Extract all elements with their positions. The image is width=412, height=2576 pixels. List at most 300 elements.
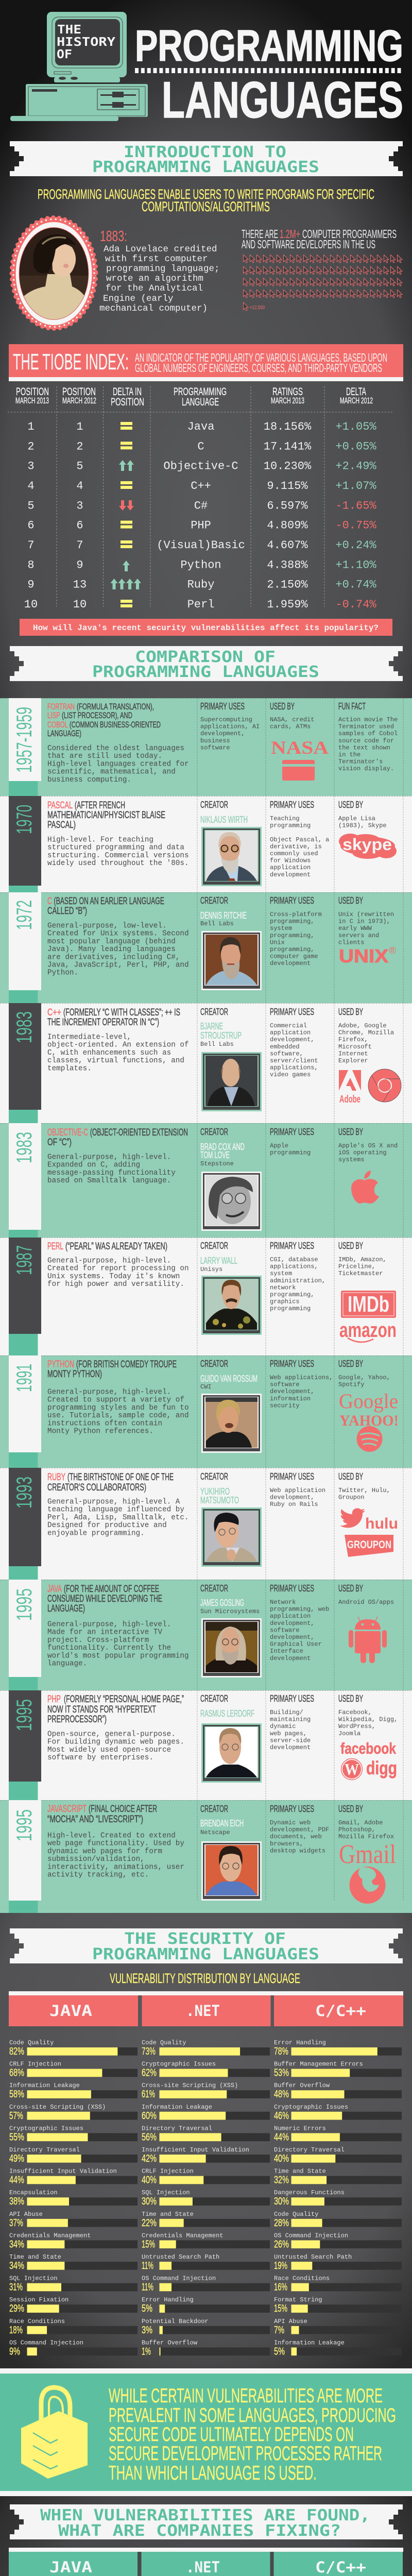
used by: USED BY	[338, 1583, 363, 1594]
description: Java). Many leading languages	[47, 945, 176, 954]
year plate 1991: 1991	[12, 1364, 36, 1392]
bar: Race Conditions 16%	[274, 2275, 402, 2293]
bar: Untrusted Search Path 19%: 19%	[274, 2260, 287, 2272]
heading banner: security: PROGRAMMING LANGUAGES	[92, 1945, 319, 1963]
used by: in C in 1973),	[338, 918, 390, 925]
dark background: security	[0, 1913, 412, 2368]
primary uses: development,	[270, 1634, 314, 1641]
language title	[47, 1127, 188, 1148]
bar: API Abuse 37%: 37%	[9, 2217, 23, 2229]
photo: Yukihiro Matsumoto	[201, 1507, 262, 1567]
bar: Cryptographic Issues 55%: Cryptographic Issues	[9, 2125, 83, 2132]
heading banner: what companies fix: WHAT ARE COMPANIES FIXING?	[58, 2522, 341, 2540]
heading banner: security	[10, 1928, 403, 1963]
heading banner: what companies fix	[10, 2504, 403, 2540]
used by: NASA, credit	[270, 716, 314, 723]
bar: Time and State 32%: Time and State	[274, 2168, 326, 2175]
primary uses: Web application	[270, 1487, 325, 1494]
bar: Time and State 22%	[142, 2211, 270, 2229]
photo: Brendan Eich	[201, 1841, 262, 1901]
logo: Adobe: Adobe	[339, 1094, 360, 1105]
table header: LANGUAGE	[182, 396, 219, 408]
used by: Ticketmaster	[338, 1270, 383, 1277]
description: structuring. Commercial versions	[47, 852, 189, 860]
table row: Java: +1.05%	[335, 420, 376, 433]
used by: USED BY	[270, 701, 295, 711]
bar: Time and State 22%: 22%	[142, 2217, 157, 2229]
year plate 1993: 1993	[12, 1477, 36, 1509]
description: functionality. Currently the	[47, 1644, 171, 1652]
primary uses: PRIMARY USES	[270, 799, 314, 810]
photo: Guido van Rossum	[201, 1394, 262, 1453]
logo: UNIX: ®	[389, 945, 396, 956]
description: dynamic web pages for form	[47, 1848, 162, 1856]
creator	[200, 1006, 242, 1048]
description: High-level. For teaching	[47, 836, 153, 844]
row: C	[9, 892, 396, 1003]
used by: Gmail, Adobe	[338, 1819, 383, 1826]
fun fact: Action movie The	[338, 716, 398, 723]
bar: Insufficient Input Validation 42%: 42%	[142, 2153, 157, 2164]
fun fact: Terminator used	[338, 723, 394, 731]
creator: CREATOR	[200, 1006, 228, 1017]
primary uses: video games	[270, 1071, 311, 1078]
bar: SQL Injection 30%: 30%	[142, 2196, 157, 2207]
language title: “MOCHA” AND “LIVESCRIPT”)	[47, 1814, 143, 1825]
language title: (BASED ON AN EARLIER LANGUAGE	[54, 896, 164, 907]
primary uses: PRIMARY USES	[270, 895, 314, 906]
year plate 1983	[9, 1003, 41, 1123]
bar: Cryptographic Issues 46%: Cryptographic Issues	[274, 2104, 348, 2111]
language tabs: vulnerability: C/C++	[315, 2002, 366, 2020]
creator: RASMUS LERDORF	[200, 1708, 254, 1719]
year plate 1995: 1995	[12, 1588, 36, 1621]
creator: Netscape	[200, 1829, 230, 1836]
table row: Perl: 10	[73, 598, 87, 611]
primary uses	[270, 1358, 333, 1409]
bar: Time and State 34%	[9, 2253, 138, 2272]
panel: TIOBE index	[8, 344, 403, 611]
primary uses: development,	[270, 1620, 314, 1627]
table row: C: +0.05%	[335, 440, 376, 453]
creator: BRAD COX AND	[200, 1142, 245, 1152]
description: enjoyable programming.	[47, 1529, 145, 1537]
description: Python.	[47, 969, 78, 977]
language title	[47, 1241, 167, 1252]
primary uses: development	[270, 1744, 311, 1751]
table header: POSITION	[16, 386, 49, 398]
bar chart: .NET vulnerabilities	[142, 2039, 270, 2357]
primary uses: computer game	[270, 953, 318, 960]
bar: Untrusted Search Path 11%: 11%	[142, 2260, 153, 2272]
bar: Potential Backdoor 3%	[142, 2318, 270, 2336]
bar: Encapsulation 38%: Encapsulation	[9, 2189, 58, 2196]
description: Monty Python references.	[47, 1427, 153, 1435]
primary uses	[270, 1803, 329, 1854]
primary uses: graphics	[270, 1298, 300, 1306]
logo: Spotify	[356, 1426, 382, 1452]
logo: IMDb: IMDb	[348, 1292, 389, 1317]
description: Created to support a variety of	[47, 1396, 184, 1404]
portrait: Ada Lovelace	[11, 217, 97, 329]
dark background: fixes and tips	[0, 2496, 412, 2576]
table row: Python: 9	[76, 558, 83, 571]
bar: OS Command Injection 11%: 11%	[142, 2282, 153, 2293]
bar: CRLF Injection 40%: 40%	[142, 2175, 157, 2186]
bar: API Abuse 37%	[9, 2211, 138, 2229]
primary uses: development, PDF	[270, 1826, 329, 1834]
row: Python	[9, 1355, 399, 1468]
bar: Cryptographic Issues 55%	[9, 2125, 138, 2143]
bar: Dangerous Functions 30%	[274, 2189, 402, 2207]
table row: Perl: Perl	[187, 598, 214, 611]
primary uses: development	[270, 960, 311, 967]
creator	[200, 1693, 254, 1719]
legend: one cursor equals 12,500	[243, 302, 265, 311]
bar: Information Leakage 5%	[274, 2339, 402, 2357]
language title: C++	[47, 1007, 61, 1018]
used by	[338, 799, 387, 829]
used by: Unix (rewritten	[338, 911, 394, 918]
language title: THE INCREMENT OPERATOR IN “C”)	[47, 1017, 159, 1028]
table row: C: 17.141%	[264, 440, 312, 453]
description: General-purpose, high-level.	[47, 1621, 171, 1629]
table header: DELTA	[346, 386, 366, 398]
icon grid: cursors	[243, 255, 403, 301]
used by: Twitter, Hulu,	[338, 1487, 390, 1494]
logo: NASA: NASA	[271, 737, 329, 758]
bar: Directory Traversal 49%: 49%	[9, 2153, 24, 2164]
primary uses: PRIMARY USES	[270, 1803, 314, 1814]
table row: Ruby: 9	[27, 579, 35, 591]
text block: 1883 Ada Lovelace: mechanical computer)	[99, 303, 208, 314]
primary uses: server/client	[270, 1057, 318, 1064]
bar: Insufficient Input Validation 42%	[142, 2146, 270, 2164]
language title: JAVA	[47, 1584, 62, 1595]
description: classes, virtual functions, and	[47, 1057, 184, 1065]
language tabs: fixes: JAVA	[49, 2558, 92, 2576]
description: Made for an interactive TV	[47, 1629, 162, 1637]
description: General-purpose, high-level.	[47, 1257, 171, 1265]
table row: C#	[27, 499, 376, 512]
language title: (FINAL CHOICE AFTER	[89, 1804, 157, 1815]
bar: Buffer Overflow 48%	[274, 2082, 402, 2100]
description: world's most popular programming	[47, 1652, 189, 1660]
table row: Python: Python	[180, 558, 221, 571]
fun fact: Terminator's	[338, 758, 383, 766]
used by: servers and	[338, 932, 379, 939]
used by: USED BY	[338, 799, 363, 810]
bar: Code Quality 82%	[9, 2039, 138, 2057]
bar: Error Handling 78%	[274, 2039, 402, 2057]
title: the history of: OF	[57, 48, 72, 61]
row: Java	[9, 1580, 394, 1690]
bar: SQL Injection 30%: SQL Injection	[142, 2189, 190, 2196]
bar: Error Handling 5%: 5%	[142, 2303, 152, 2314]
primary uses: security	[270, 1402, 300, 1409]
used by	[338, 895, 394, 946]
year plate 1993	[9, 1468, 41, 1580]
description: General-purpose, high-level. A	[47, 1498, 180, 1506]
creator: Stepstone	[200, 1160, 234, 1167]
language title: CALLED “B”)	[47, 906, 87, 917]
creator	[200, 1803, 244, 1836]
table row: Objective-C: 3	[27, 460, 35, 473]
text block: 1883 Ada Lovelace: programming language;	[106, 264, 220, 274]
table row: Perl: 1.959%	[267, 598, 308, 611]
bar: Directory Traversal 40%: 40%	[274, 2153, 289, 2164]
heading banner: comparison: COMPARISON OF	[135, 648, 276, 666]
fun fact: vision display.	[338, 765, 394, 772]
primary uses: application	[270, 1613, 311, 1620]
primary uses: PRIMARY USES	[270, 1583, 314, 1594]
table row: C++: 4	[76, 480, 83, 493]
table row: Objective-C: +2.49%	[335, 460, 376, 473]
fun fact	[338, 701, 398, 772]
language title: (FOR BRITISH COMEDY TROUPE	[76, 1359, 177, 1370]
creator	[200, 1240, 237, 1273]
bar: Directory Traversal 56%	[142, 2125, 270, 2143]
creator	[200, 1126, 245, 1167]
description: Created for Unix systems. Second	[47, 930, 189, 938]
primary uses: Graphical User	[270, 1641, 322, 1648]
description: Java, JavaScript, Perl, PHP, and	[47, 961, 189, 970]
language title	[47, 1472, 174, 1493]
heading banner: comparison	[10, 646, 403, 681]
table row: PHP: 4.809%	[267, 519, 308, 532]
bar: CRLF Injection 68%: CRLF Injection	[9, 2061, 61, 2068]
primary uses: Network	[270, 1599, 296, 1606]
bar: Race Conditions 16%: 16%	[274, 2282, 287, 2293]
language title	[47, 1359, 177, 1380]
used by: USED BY	[338, 1693, 363, 1704]
logo: Yahoo: YAHOO!	[339, 1412, 399, 1429]
logo: Apple	[351, 1171, 379, 1204]
bar: Cross-site Scripting 57%	[9, 2104, 138, 2122]
bar: Untrusted Search Path 19%: Untrusted Search Path	[274, 2253, 352, 2261]
creator: CREATOR	[200, 799, 228, 810]
bar: Credentials Management 15%: Credentials Management	[142, 2232, 223, 2239]
language title: PERL	[47, 1241, 63, 1252]
primary uses: Unix	[270, 939, 285, 946]
table header: POSITION	[111, 396, 144, 408]
creator: GUIDO VAN ROSSUM	[200, 1374, 258, 1384]
table header: PROGRAMMING	[174, 386, 227, 398]
bar: Error Handling 78%: 78%	[274, 2046, 288, 2057]
language title: CONSUMED WHILE DEVELOPING THE	[47, 1594, 162, 1604]
bar: Buffer Overflow 1%	[142, 2339, 270, 2357]
bar: Time and State 32%: 32%	[274, 2175, 289, 2186]
photo: Dennis Ritchie	[201, 931, 262, 990]
table row: Ruby: +0.74%	[335, 579, 376, 591]
bar: Untrusted Search Path 11%	[142, 2253, 270, 2272]
description: project. Cross-platform	[47, 1636, 149, 1645]
creator: CREATOR	[200, 1471, 228, 1482]
creator: BJARNE	[200, 1021, 223, 1031]
bar: Numeric Errors 44%: 44%	[274, 2131, 289, 2143]
primary uses: for Windows	[270, 857, 311, 865]
table row: Perl: -0.74%	[335, 598, 376, 611]
table header: MARCH 2012	[340, 396, 373, 405]
primary uses	[270, 1583, 329, 1662]
language title: LANGUAGE)	[47, 728, 81, 738]
bar: CRLF Injection 40%	[142, 2168, 270, 2186]
description: Created for report processing on	[47, 1265, 189, 1273]
bar: Race Conditions 18%	[9, 2318, 138, 2336]
bar: Encapsulation 38%: 38%	[9, 2196, 24, 2207]
table row: Ruby	[27, 579, 376, 591]
primary uses: CGI, database	[270, 1256, 318, 1263]
table row: Visual Basic: +0.24%	[335, 539, 376, 552]
bar: Credentials Management 34%	[9, 2232, 138, 2250]
logo: Groupon	[345, 1535, 393, 1557]
primary uses	[200, 701, 260, 751]
bar: Directory Traversal 56%: 56%	[142, 2131, 157, 2143]
bar: Buffer Management Errors 53%: Buffer Management Errors	[274, 2061, 363, 2068]
bar: API Abuse 7%: API Abuse	[274, 2318, 307, 2325]
creator	[200, 895, 247, 927]
creator	[200, 799, 248, 825]
bar: Cryptographic Issues 62%: 62%	[142, 2067, 157, 2079]
primary uses: development,	[270, 1036, 314, 1043]
table row: PHP: PHP	[191, 519, 211, 532]
row: PHP	[9, 1690, 398, 1800]
logo: Hulu: hulu	[365, 1515, 398, 1532]
used by	[338, 1693, 398, 1737]
description: activity tracking, etc.	[47, 1871, 149, 1879]
table row: C: 2	[76, 440, 83, 453]
language title: PASCAL	[47, 800, 73, 811]
table row: Ruby: Ruby	[187, 579, 214, 591]
language title: PASCAL)	[47, 820, 76, 831]
table row: Ruby: 2.150%	[267, 579, 308, 591]
bar: Cross-site Scripting 61%: 61%	[142, 2089, 155, 2100]
year plate 1970	[9, 796, 41, 892]
logo: Facebook: facebook	[340, 1739, 397, 1757]
table row: PHP	[27, 519, 376, 532]
language title: OBJECTIVE-C	[47, 1127, 88, 1138]
used by: systems	[338, 1156, 364, 1163]
table row: Visual Basic: (Visual)Basic	[157, 539, 245, 552]
used by: cards, ATMs	[270, 723, 311, 731]
bar: OS Command Injection 26%: OS Command Injection	[274, 2232, 348, 2239]
primary uses: development	[270, 1655, 311, 1662]
language title: CREATOR'S COLLABORATORS)	[47, 1482, 146, 1493]
used by: WordPress,	[338, 1723, 375, 1730]
creator: Sun Microsystems	[200, 1608, 260, 1615]
description: language.	[47, 1660, 87, 1668]
bar: Numeric Errors 44%	[274, 2125, 402, 2143]
creator: STROUSTRUP	[200, 1030, 242, 1041]
description: High-level languages created for	[47, 760, 189, 768]
bar: Dangerous Functions 30%: 30%	[274, 2196, 289, 2207]
creator: CWI	[200, 1383, 212, 1391]
creator: CREATOR	[200, 1126, 228, 1137]
logo: UNIX: UNIX	[339, 945, 388, 967]
logo: Firefox	[349, 1867, 385, 1904]
primary uses: programming	[270, 1305, 311, 1312]
bar chart: C/C++ vulnerabilities	[274, 2039, 402, 2357]
creator: CREATOR	[200, 1240, 228, 1251]
bar: Dangerous Functions 30%: Dangerous Functions	[274, 2189, 345, 2196]
bar: Information Leakage 60%	[142, 2104, 270, 2122]
stat: programmers count	[242, 227, 403, 311]
description: business computing.	[47, 776, 131, 784]
row: Perl	[9, 1238, 397, 1355]
year plate 1957-1959: 1957-1959	[12, 707, 36, 773]
language title: (“PEARL” WAS ALREADY TAKEN)	[65, 1241, 167, 1252]
row: Fortran, Lisp, Cobol	[9, 698, 398, 796]
table row: C: C	[197, 440, 204, 453]
row: Objective-C	[9, 1123, 398, 1238]
primary uses	[270, 1126, 314, 1157]
language title: JAVASCRIPT	[47, 1804, 87, 1815]
table row: C++: +1.07%	[335, 480, 376, 493]
photo: Larry Wall	[201, 1276, 262, 1335]
primary uses: applications, AI	[200, 723, 260, 731]
primary uses: development,	[270, 1388, 314, 1395]
callout: Java security question: How will Java's recent security vulnerabilities affect its popularity?	[33, 623, 379, 633]
creator: CREATOR	[200, 1358, 228, 1369]
year plate 1983	[9, 1123, 41, 1238]
bar: OS Command Injection 26%: 26%	[274, 2239, 289, 2250]
table row: C#: 3	[76, 499, 83, 512]
language title: PHP	[47, 1694, 61, 1705]
bar: OS Command Injection 9%	[9, 2339, 138, 2357]
bar: Information Leakage 60%: Information Leakage	[142, 2104, 212, 2111]
primary uses: programming,	[270, 932, 314, 939]
bar: Cryptographic Issues 62%	[142, 2061, 270, 2079]
table row: Python	[27, 558, 376, 571]
description: instructions often contain	[47, 1419, 162, 1428]
logo: Gmail: Gmail	[339, 1840, 396, 1869]
bar: Buffer Management Errors 53%	[274, 2061, 402, 2079]
title: the history of: THE	[57, 23, 81, 37]
used by: Wikipedia, Digg,	[338, 1716, 398, 1723]
used by: iOS operating	[338, 1149, 387, 1157]
year plate 1987	[9, 1238, 41, 1355]
primary uses: Building/	[270, 1709, 303, 1716]
bar: API Abuse 7%: 7%	[274, 2325, 284, 2336]
callout: Java security question	[20, 619, 392, 636]
creator: CREATOR	[200, 1583, 228, 1594]
row: Ruby	[9, 1468, 398, 1580]
bar: Cryptographic Issues 46%	[274, 2104, 402, 2122]
table row: Visual Basic: 4.607%	[267, 539, 308, 552]
description: use. Tutorials, sample code, and	[47, 1412, 189, 1420]
text block: 1883 Ada Lovelace	[99, 228, 225, 314]
year plate 1995: 1995	[12, 1699, 36, 1731]
logo: WordPress	[341, 1759, 363, 1780]
table header: POSITION	[62, 386, 96, 398]
bar: OS Command Injection 9%: 9%	[9, 2346, 20, 2357]
stat: programmers count: 1.2M+	[280, 227, 300, 241]
table row: PHP: 6	[76, 519, 83, 532]
bar: SQL Injection 31%	[9, 2275, 138, 2293]
primary uses: development,	[270, 1494, 314, 1501]
bar: Untrusted Search Path 19%	[274, 2253, 402, 2272]
creator	[200, 1471, 239, 1505]
primary uses: documents, web	[270, 1833, 322, 1840]
creator: NIKLAUS WIRTH	[200, 815, 248, 825]
year plate 1995	[9, 1580, 41, 1690]
title: the history of	[57, 23, 115, 61]
bar: Potential Backdoor 3%: Potential Backdoor	[142, 2318, 209, 2325]
used by: Firefox,	[338, 1036, 368, 1043]
bar: OS Command Injection 9%: OS Command Injection	[9, 2339, 83, 2346]
bar: SQL Injection 31%: 31%	[9, 2282, 23, 2293]
primary uses: system	[270, 925, 292, 932]
